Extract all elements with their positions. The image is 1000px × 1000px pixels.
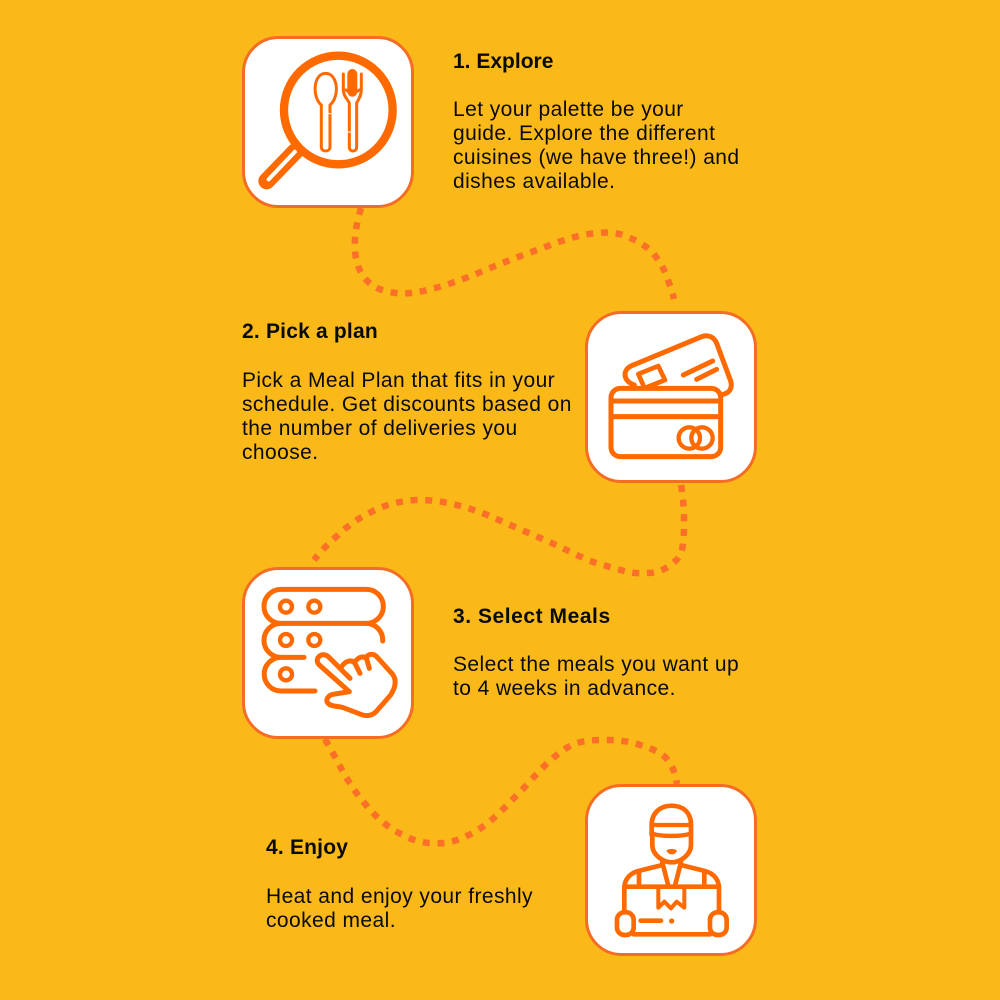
text block: step 4 enjoy: cooked meal.: [266, 909, 396, 932]
icon: magnifier with spoon and fork: [267, 56, 393, 181]
dotted route: step 1 to step 2: [355, 208, 674, 299]
text block: step 1 explore: guide. Explore the different: [453, 122, 715, 145]
panel: select meals card: [244, 568, 412, 738]
text block: step 2 pick a plan: Pick a Meal Plan that fits in your: [242, 369, 555, 392]
icon: delivery person holding box: [617, 806, 727, 935]
text block: step 1 explore: cuisines (we have three!) and: [453, 146, 740, 169]
text block: step 4 enjoy: [266, 836, 533, 932]
text block: step 2 pick a plan: [242, 320, 572, 464]
text block: step 4 enjoy: Heat and enjoy your freshly: [266, 885, 533, 908]
text block: step 2 pick a plan: choose.: [242, 441, 318, 464]
text block: step 3 select meals: 3. Select Meals: [453, 605, 611, 628]
text block: step 2 pick a plan: schedule. Get discounts based on: [242, 393, 572, 416]
panel: enjoy card: [586, 786, 756, 954]
dotted route: step 2 to step 3: [314, 485, 684, 573]
text block: step 3 select meals: [453, 605, 739, 700]
text block: step 1 explore: dishes available.: [453, 170, 615, 193]
icon: menu list with pointing hand: [264, 589, 395, 716]
text block: step 1 explore: [453, 50, 740, 193]
text block: step 3 select meals: Select the meals you want up: [453, 653, 739, 676]
text block: step 2 pick a plan: 2. Pick a plan: [242, 320, 378, 343]
panel: plan card: [586, 312, 756, 482]
dotted route: step 3 to step 4: [325, 739, 677, 843]
icon: credit cards: [611, 336, 731, 457]
text block: step 3 select meals: to 4 weeks in advance.: [453, 677, 676, 700]
text block: step 2 pick a plan: the number of deliveries you: [242, 417, 518, 440]
text block: step 4 enjoy: 4. Enjoy: [266, 836, 348, 859]
text block: step 1 explore: Let your palette be your: [453, 98, 684, 121]
panel: explore card: [244, 38, 412, 206]
text block: step 1 explore: 1. Explore: [453, 50, 553, 73]
